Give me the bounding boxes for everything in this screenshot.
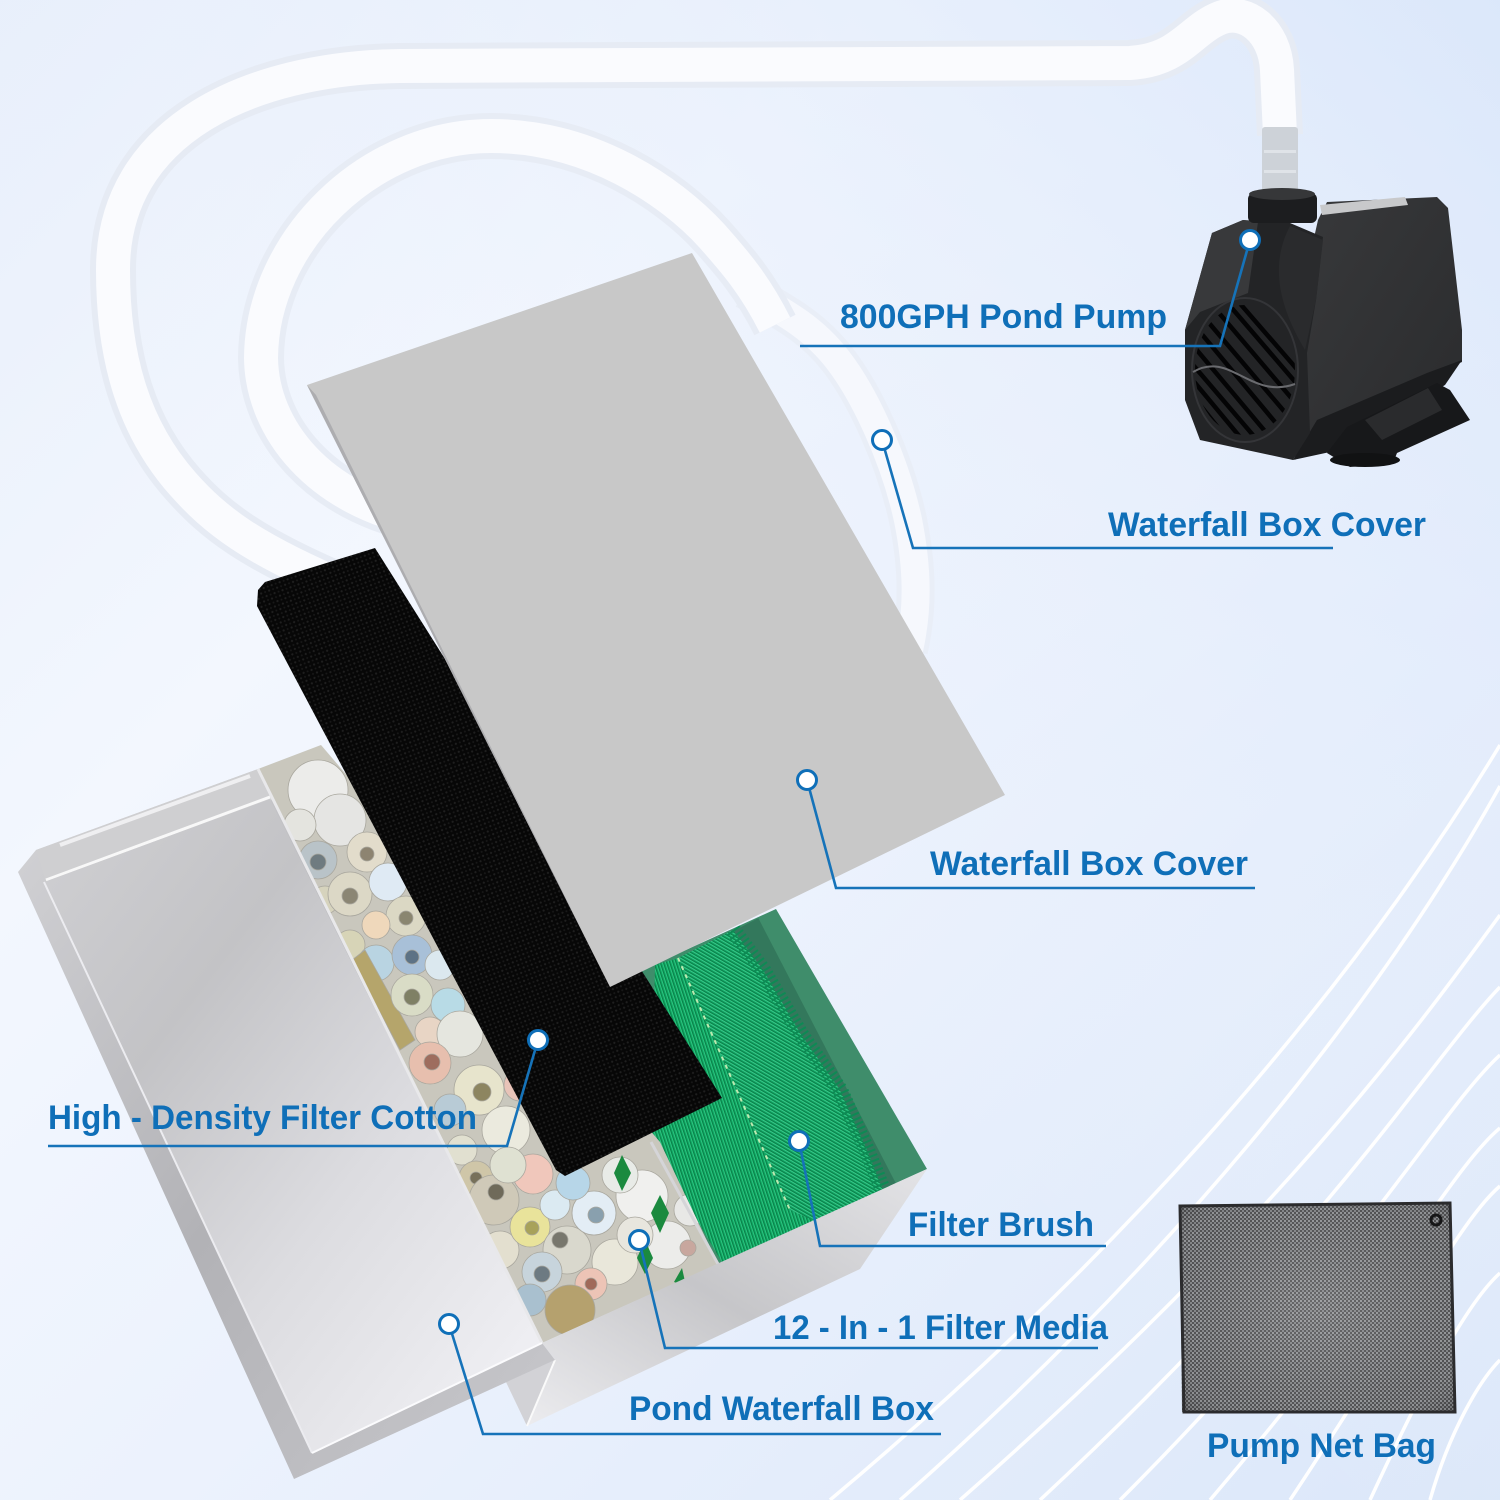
filter foam bbox=[257, 548, 722, 1176]
pump front face bbox=[1185, 220, 1323, 460]
pump bbox=[1176, 127, 1470, 467]
callout: Waterfall Box Cover (hose): Waterfall Box Cover bbox=[1108, 506, 1426, 544]
hose bbox=[113, 16, 1280, 650]
callout: 12-In-1 Filter Media: 12 - In - 1 Filter Media bbox=[773, 1309, 1109, 1347]
callout: Waterfall Box Cover: Waterfall Box Cover bbox=[930, 845, 1248, 883]
callout: Pond Waterfall Box: Pond Waterfall Box bbox=[629, 1390, 934, 1428]
callout: Pond Waterfall Box bbox=[440, 1314, 941, 1434]
pump feet bbox=[1327, 383, 1470, 467]
callout: Waterfall Box Cover (hose) bbox=[872, 430, 1426, 548]
green brush compartment bbox=[642, 909, 927, 1263]
nozzle bbox=[1262, 127, 1298, 193]
waterfall box cover panel bbox=[307, 253, 1005, 987]
callout: Filter Brush: Filter Brush bbox=[908, 1206, 1094, 1244]
collar bbox=[1248, 188, 1317, 223]
pond waterfall box bbox=[18, 740, 940, 1479]
filter media bbox=[250, 740, 730, 1360]
callout: High-Density Filter Cotton bbox=[48, 1030, 548, 1146]
callout: Filter Brush bbox=[790, 1132, 1106, 1246]
box front wall bbox=[506, 1169, 927, 1426]
callout: 12-In-1 Filter Media bbox=[630, 1230, 1109, 1348]
callout: Waterfall Box Cover bbox=[798, 770, 1255, 888]
net bag bbox=[1180, 1203, 1455, 1412]
callout: 800GPH Pond Pump: 800GPH Pond Pump bbox=[840, 298, 1167, 336]
compartment divider bbox=[651, 1142, 718, 1264]
callout: High-Density Filter Cotton: High - Density Filter Cotton bbox=[48, 1099, 477, 1137]
label: Pump Net Bag: Pump Net Bag bbox=[1207, 1427, 1436, 1465]
waterfall lid bbox=[18, 769, 555, 1479]
grille bbox=[1191, 297, 1299, 443]
pump side panel bbox=[1295, 197, 1462, 460]
lower body band bbox=[1293, 360, 1462, 460]
callout: 800GPH Pond Pump bbox=[800, 230, 1260, 346]
